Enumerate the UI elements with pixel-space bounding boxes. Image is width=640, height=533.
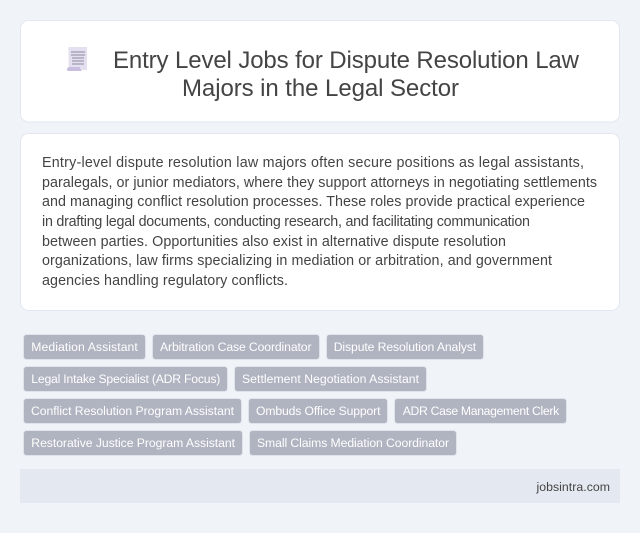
tag: Conflict Resolution Program Assistant	[31, 404, 235, 418]
tag	[326, 334, 484, 360]
panel: description: Entry-level dispute resolution law majors often secure positions as legal assistants,	[42, 155, 584, 171]
tag: Small Claims Mediation Coordinator	[257, 436, 449, 450]
tag: Arbitration Case Coordinator	[160, 340, 312, 354]
tag: Dispute Resolution Analyst	[334, 340, 477, 354]
tag	[24, 334, 146, 360]
panel: description	[20, 134, 620, 310]
icon: document scroll	[67, 47, 87, 71]
tag	[24, 430, 242, 456]
tag: Restorative Justice Program Assistant	[31, 436, 236, 450]
tag: Settlement Negotiation Assistant	[242, 372, 420, 386]
panel: description: and managing conflict resolution processes. These roles provide practical experience	[42, 194, 585, 210]
panel: title card	[20, 20, 620, 122]
footer bar	[20, 469, 620, 503]
tag	[152, 334, 320, 360]
panel: description: in drafting legal documents, conducting research, and facilitating communication	[42, 214, 530, 230]
tag: ADR Case Management Clerk	[403, 404, 560, 418]
tag	[250, 430, 456, 456]
title	[113, 47, 580, 102]
tags: job titles	[24, 334, 566, 456]
title: Majors in the Legal Sector	[182, 75, 459, 102]
panel: description: agencies handling regulatory conflicts.	[42, 273, 288, 289]
tag	[394, 398, 566, 424]
tag: Legal Intake Specialist (ADR Focus)	[31, 372, 220, 386]
panel: description: between parties. Opportunities also exist in alternative dispute resolution	[42, 234, 506, 250]
tag	[24, 398, 242, 424]
tag	[234, 366, 426, 392]
tag	[248, 398, 388, 424]
footer bar: jobsintra.com	[536, 480, 610, 494]
title: Entry Level Jobs for Dispute Resolution Law	[113, 47, 580, 74]
tag	[24, 366, 228, 392]
panel: description: organizations, law firms specializing in mediation or arbitration, and government	[42, 253, 552, 269]
panel: description: paralegals, or junior mediators, where they support attorneys in negotiating settlements	[42, 175, 597, 191]
tag: Mediation Assistant	[31, 340, 138, 354]
tag: Ombuds Office Support	[256, 404, 381, 418]
